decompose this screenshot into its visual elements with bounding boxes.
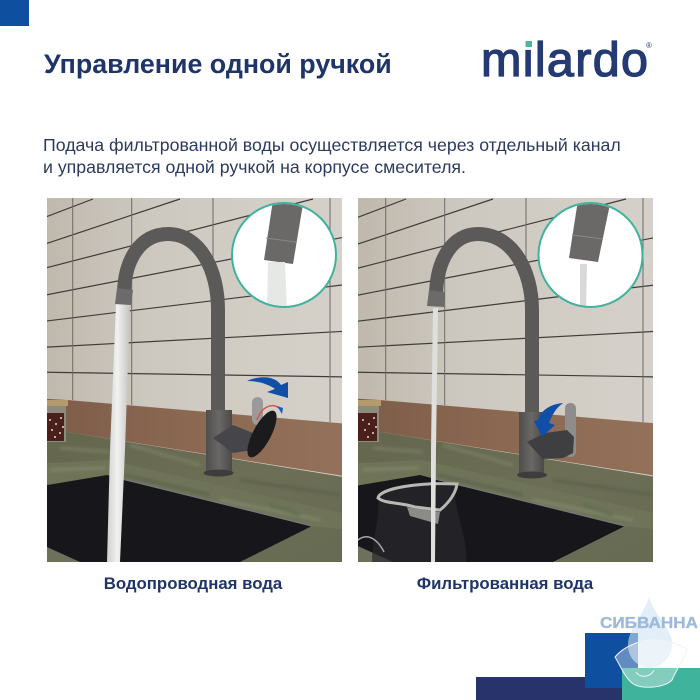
water stream [107,304,130,562]
decorative corner square [0,0,29,26]
watermark: sibvanna [600,598,698,688]
faucet [115,234,282,476]
description text [43,135,621,177]
decorative corner blocks [476,633,700,700]
water stream [431,308,438,562]
panel: filtered water photo [358,198,653,562]
faucet [427,234,576,478]
glass jug [358,484,466,562]
inset circle: spout close-up [538,200,642,310]
caption: filtered water: Фильтрованная вода [417,574,593,593]
logo: milardo: ® [646,41,652,50]
caption: tap water: Водопроводная вода [104,574,282,593]
watermark: sibvanna: СИБВАННА [600,615,698,632]
inset circle: spout close-up [232,200,336,310]
logo: milardo: milardo [481,33,648,86]
description text: и управляется одной ручкой на корпусе смесителя. [43,157,466,177]
arrow: lever down [534,403,563,437]
title: Управление одной ручкой [44,49,392,79]
arrow: lever turn [247,377,288,420]
panel: tap water photo [47,198,342,562]
description text: Подача фильтрованной воды осуществляется через отдельный канал [43,135,621,155]
